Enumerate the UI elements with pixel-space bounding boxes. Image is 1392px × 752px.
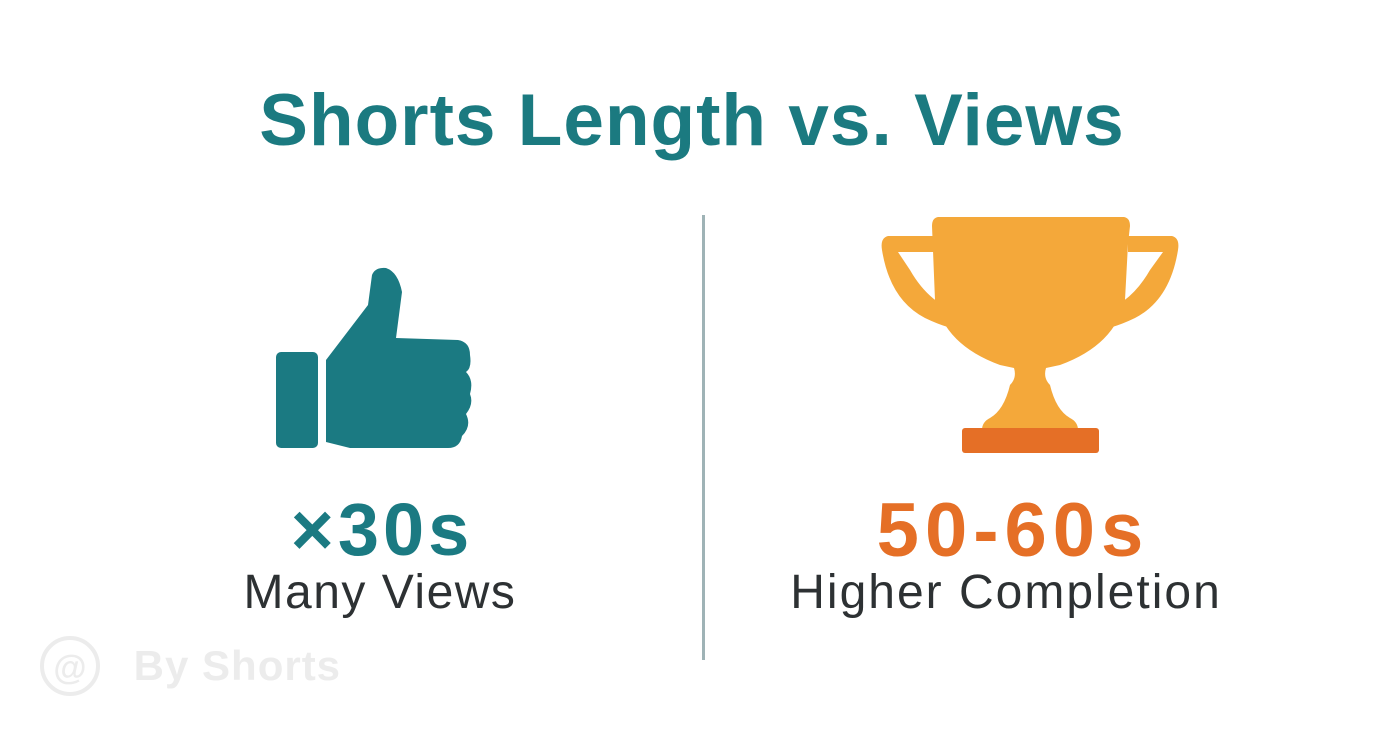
stat: 50-60s: 50-60s (877, 488, 1149, 573)
stat: under 30s: ×30s (291, 488, 473, 571)
watermark (40, 636, 341, 696)
watermark: @ (53, 649, 87, 687)
watermark: By Shorts (134, 642, 341, 689)
icon: trophy (882, 217, 1178, 453)
divider (702, 215, 705, 660)
title: Shorts Length vs. Views (259, 80, 1125, 161)
label: higher completion: Higher Completion (790, 566, 1222, 619)
label: many views: Many Views (244, 566, 516, 619)
